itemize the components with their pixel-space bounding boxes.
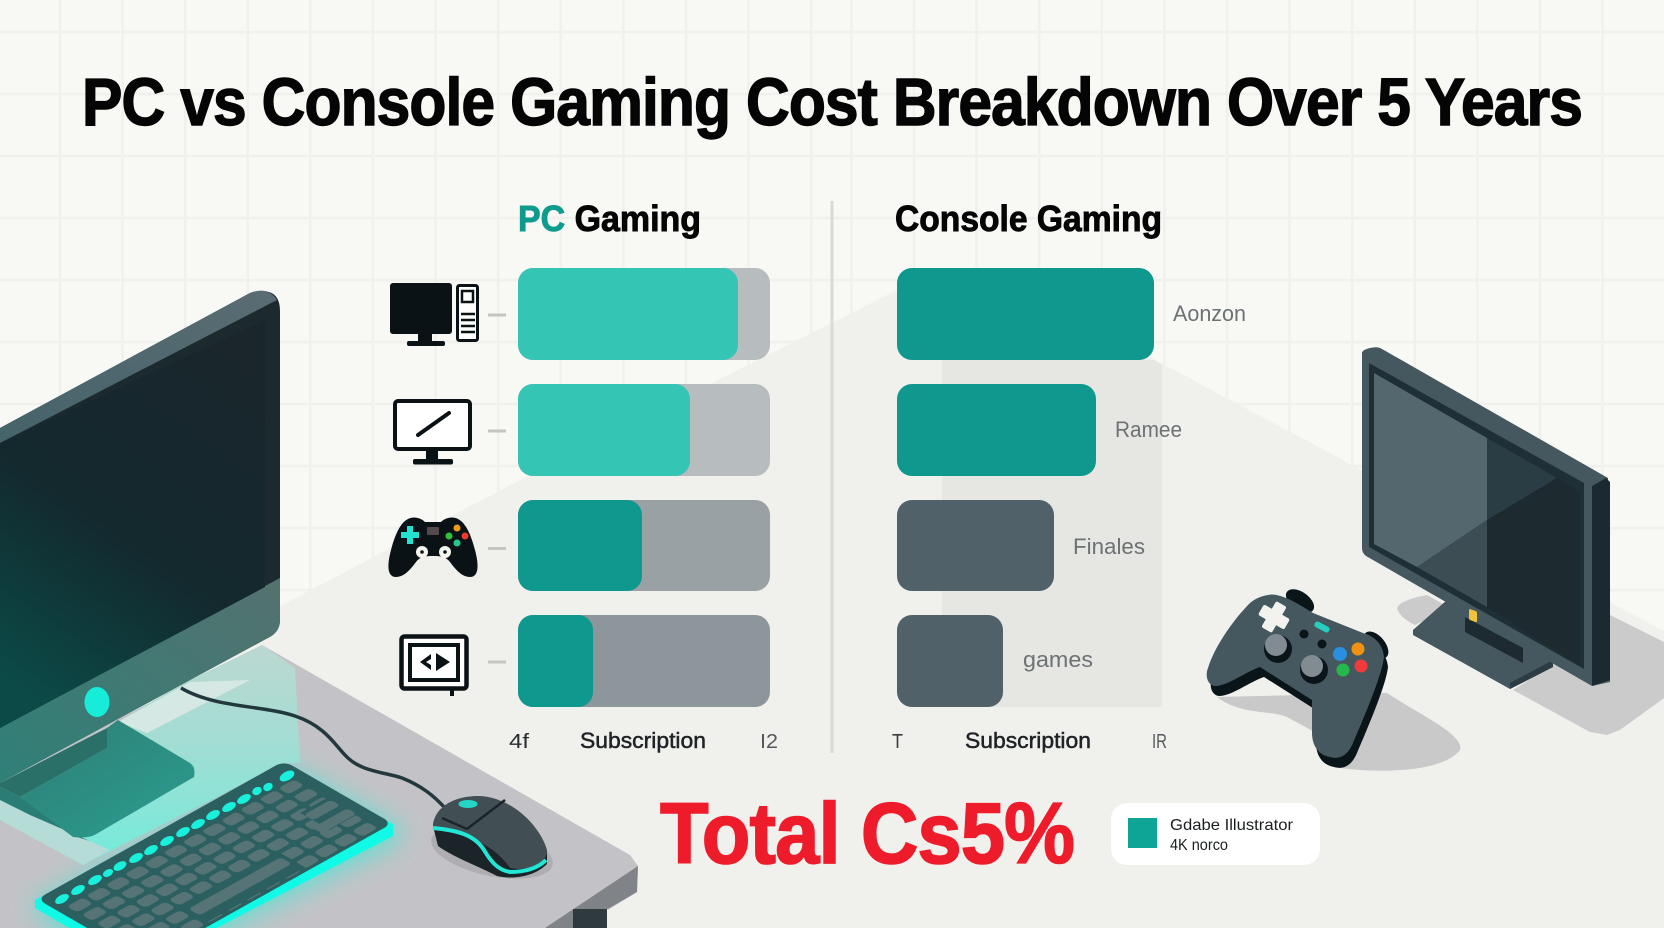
PC gaming bar chart <box>518 268 770 707</box>
status light <box>1469 609 1477 623</box>
key grid <box>63 777 382 928</box>
keyboard <box>35 761 393 928</box>
floor surface <box>0 272 1664 928</box>
right illustration: console monitor <box>1362 347 1664 735</box>
PC bar 4 <box>518 615 770 707</box>
monitor frame <box>1362 347 1610 686</box>
controller bumpers <box>1282 584 1393 663</box>
monitor screen reflection <box>1417 520 1487 607</box>
PC bar 1 <box>518 268 770 360</box>
d-pad <box>1254 597 1294 637</box>
pale light band <box>118 680 250 733</box>
column heading: Console Gaming: Console Gaming <box>895 198 1162 239</box>
long keys <box>293 797 358 834</box>
illustration: PC desk setup <box>0 291 640 928</box>
console axis labels: Subscription <box>965 728 1091 753</box>
icon: gamepad <box>388 518 478 577</box>
legend card <box>1111 803 1320 865</box>
console bar labels: Finales <box>1073 534 1145 559</box>
divider between the columns <box>830 201 834 753</box>
total callout: Total Cs5% <box>660 786 1074 882</box>
power light <box>84 687 110 717</box>
legend text: Gdabe Illustrator <box>1170 817 1294 834</box>
monitor shadow <box>1397 595 1664 735</box>
PC bar 3 <box>518 500 770 591</box>
right stick <box>1300 655 1328 684</box>
monitor side <box>1592 478 1610 686</box>
legend text: 4K norco <box>1170 837 1228 854</box>
console axis labels: IR <box>1152 731 1167 753</box>
PC axis labels: 4f <box>509 731 530 753</box>
face buttons <box>1333 642 1368 676</box>
icon: monitor <box>395 401 470 464</box>
space bar <box>180 852 305 923</box>
connector dash 3 <box>488 547 506 550</box>
console bar labels: Ramee <box>1115 417 1182 442</box>
menu pill <box>1314 621 1330 633</box>
PC bar 2 <box>518 384 770 476</box>
console bar 3 <box>897 500 1054 591</box>
console axis labels: T <box>892 731 903 753</box>
legend swatch <box>1128 818 1157 848</box>
console bar 2 <box>897 384 1096 476</box>
monitor bezel <box>1369 363 1584 669</box>
PC axis labels: Subscription <box>580 728 706 753</box>
monitor body <box>0 291 280 729</box>
console bar labels: Aonzon <box>1173 301 1246 326</box>
chart backdrop panel <box>942 360 1162 707</box>
console gaming bar chart <box>897 268 1154 707</box>
monitor chin <box>0 578 280 783</box>
controller underside <box>1211 605 1388 768</box>
connector dash 1 <box>488 314 506 316</box>
keyboard light edge <box>35 770 393 928</box>
pale strip under the stand <box>0 790 110 865</box>
console bar 1 <box>897 268 1154 360</box>
legend text <box>1170 817 1294 854</box>
monitor screen <box>0 320 265 728</box>
monitor screen light <box>1374 373 1487 567</box>
console bar labels: games <box>1023 647 1093 672</box>
connector dash 2 <box>488 430 506 432</box>
right illustration: game controller <box>1207 584 1460 771</box>
desk <box>0 645 640 928</box>
monitor screen mid <box>1487 438 1557 520</box>
PC axis labels <box>509 728 778 753</box>
PC axis labels: I2 <box>760 731 778 753</box>
keyboard glow spread on desk <box>30 762 400 928</box>
monitor stand <box>0 720 194 841</box>
led keys <box>54 768 296 906</box>
monitor screen dark <box>1487 478 1580 666</box>
mouse <box>426 796 558 888</box>
console bar labels <box>1023 301 1246 672</box>
left stick <box>1264 634 1292 663</box>
keyboard top <box>37 761 392 928</box>
centre dots <box>1300 630 1326 648</box>
column heading: PC Gaming: PC Gaming <box>518 198 701 239</box>
controller body <box>1207 595 1384 758</box>
icon: desktop computer <box>390 283 478 346</box>
console bar 4 <box>897 615 1003 707</box>
console axis labels <box>892 728 1167 753</box>
connector dash 4 <box>488 660 506 664</box>
cable <box>181 688 445 808</box>
left monitor <box>0 291 280 841</box>
monitor light on desk <box>0 645 300 865</box>
controller shadow <box>1217 693 1460 771</box>
monitor base <box>1413 600 1553 689</box>
icon: game disc box <box>402 636 466 696</box>
